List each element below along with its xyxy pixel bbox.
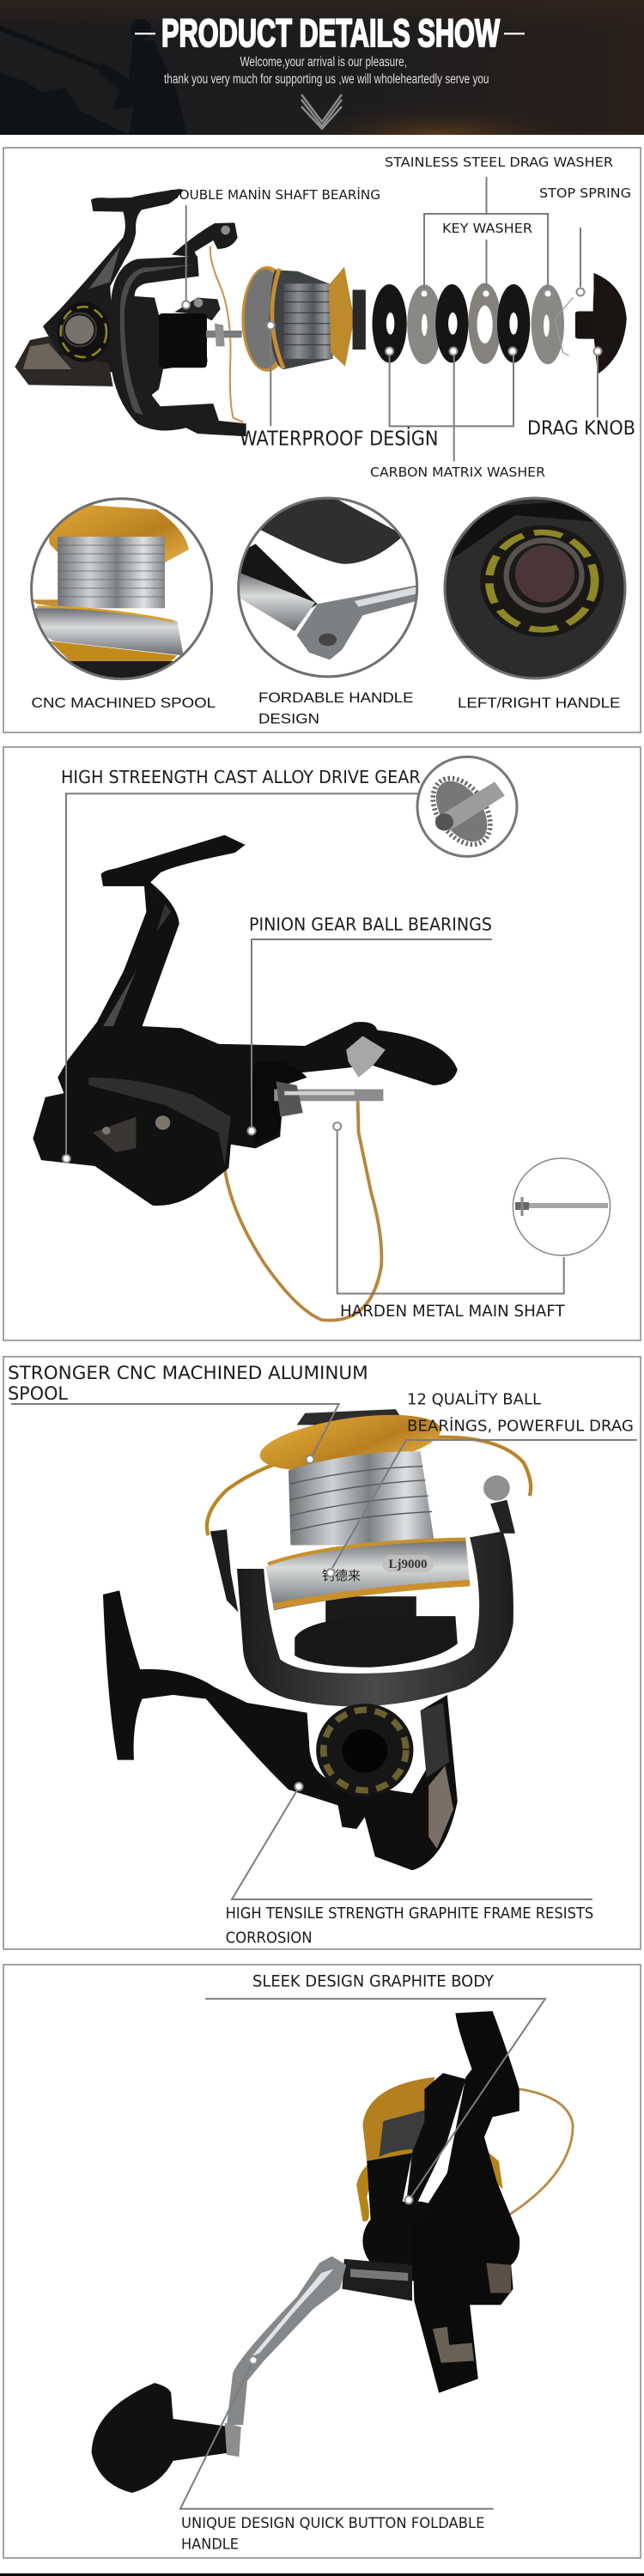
exploded view labels: WATERPROOF DESİGN xyxy=(240,426,438,450)
panel labels xyxy=(61,767,565,1321)
exploded view labels xyxy=(169,155,635,480)
header subtitle: thank you very much for supporting us ,we will wholeheartedly serve you xyxy=(164,72,489,87)
circle labels xyxy=(31,690,620,727)
callout dots xyxy=(182,289,601,355)
panel lines xyxy=(11,1404,637,1899)
circle labels: DESIGN xyxy=(258,711,319,727)
exploded view labels: KEY WASHER xyxy=(442,221,532,236)
exploded reel body xyxy=(15,189,246,436)
panel dots xyxy=(295,1455,335,1790)
panel labels xyxy=(181,1972,495,2552)
panel lines xyxy=(66,793,564,1293)
panel lines xyxy=(180,1999,545,2509)
circle: drive gear xyxy=(417,756,517,856)
panel labels: CORROSION xyxy=(226,1929,313,1947)
reel handle view xyxy=(92,2011,573,2493)
exploded view labels: CARBON MATRIX WASHER xyxy=(370,465,545,480)
angler silhouette xyxy=(0,19,187,135)
circle: main shaft xyxy=(513,1158,611,1255)
panel: spool and frame xyxy=(3,1357,641,1949)
panel labels: STRONGER CNC MACHINED ALUMINUM xyxy=(8,1363,368,1383)
exploded spool, washers and knob xyxy=(241,266,627,374)
spool branding: Lj9000 xyxy=(388,1558,428,1571)
circle labels: LEFT/RIGHT HANDLE xyxy=(458,695,620,711)
exploded view labels: DOUBLE MANİN SHAFT BEARİNG xyxy=(169,186,380,203)
header title: PRODUCT DETAILS SHOW xyxy=(161,11,500,55)
spool branding: 钓德来 xyxy=(322,1568,361,1583)
panel labels: PINION GEAR BALL BEARINGS xyxy=(249,914,492,935)
panel dots xyxy=(63,1122,341,1163)
header subtitle: Welcome,your arrival is our pleasure, xyxy=(240,55,407,70)
panel: drive gear and shaft xyxy=(3,747,641,1340)
exploded view callout lines xyxy=(186,177,598,462)
panel labels: SPOOL xyxy=(8,1383,68,1404)
title dash right xyxy=(504,33,525,34)
panel labels: BEARİNGS, POWERFUL DRAG xyxy=(407,1417,634,1435)
panel labels: HARDEN METAL MAIN SHAFT xyxy=(340,1302,565,1321)
circle labels: FORDABLE HANDLE xyxy=(258,690,414,706)
reel front view xyxy=(103,1405,531,1870)
header banner xyxy=(0,0,644,135)
reel side view xyxy=(33,835,458,1321)
panel dots xyxy=(249,2196,412,2364)
exploded view labels: STOP SPRING xyxy=(539,185,631,201)
panel labels: HIGH TENSILE STRENGTH GRAPHITE FRAME RESISTS xyxy=(226,1905,593,1923)
chevron arrow xyxy=(301,94,342,129)
circle: left/right handle detail xyxy=(441,495,630,681)
panel labels: HANDLE xyxy=(181,2536,239,2552)
panel: exploded view xyxy=(3,148,641,732)
footer bar xyxy=(0,2573,644,2576)
spool branding xyxy=(322,1555,434,1583)
panel labels: HIGH STREENGTH CAST ALLOY DRIVE GEAR xyxy=(61,767,421,787)
title dash left xyxy=(135,33,155,34)
circle: handle detail xyxy=(235,495,417,677)
header subtitle xyxy=(164,55,489,87)
panel labels: SLEEK DESIGN GRAPHITE BODY xyxy=(252,1972,495,1990)
circle labels: CNC MACHINED SPOOL xyxy=(31,695,216,711)
panel: body and handle xyxy=(3,1965,641,2558)
panel labels: UNIQUE DESIGN QUICK BUTTON FOLDABLE xyxy=(181,2515,484,2531)
panel labels xyxy=(8,1363,634,1947)
exploded view labels: STAINLESS STEEL DRAG WASHER xyxy=(385,155,613,170)
circle: spool detail xyxy=(31,499,212,681)
panel labels: 12 QUALİTY BALL xyxy=(407,1391,541,1409)
exploded view labels: DRAG KNOB xyxy=(527,418,635,440)
